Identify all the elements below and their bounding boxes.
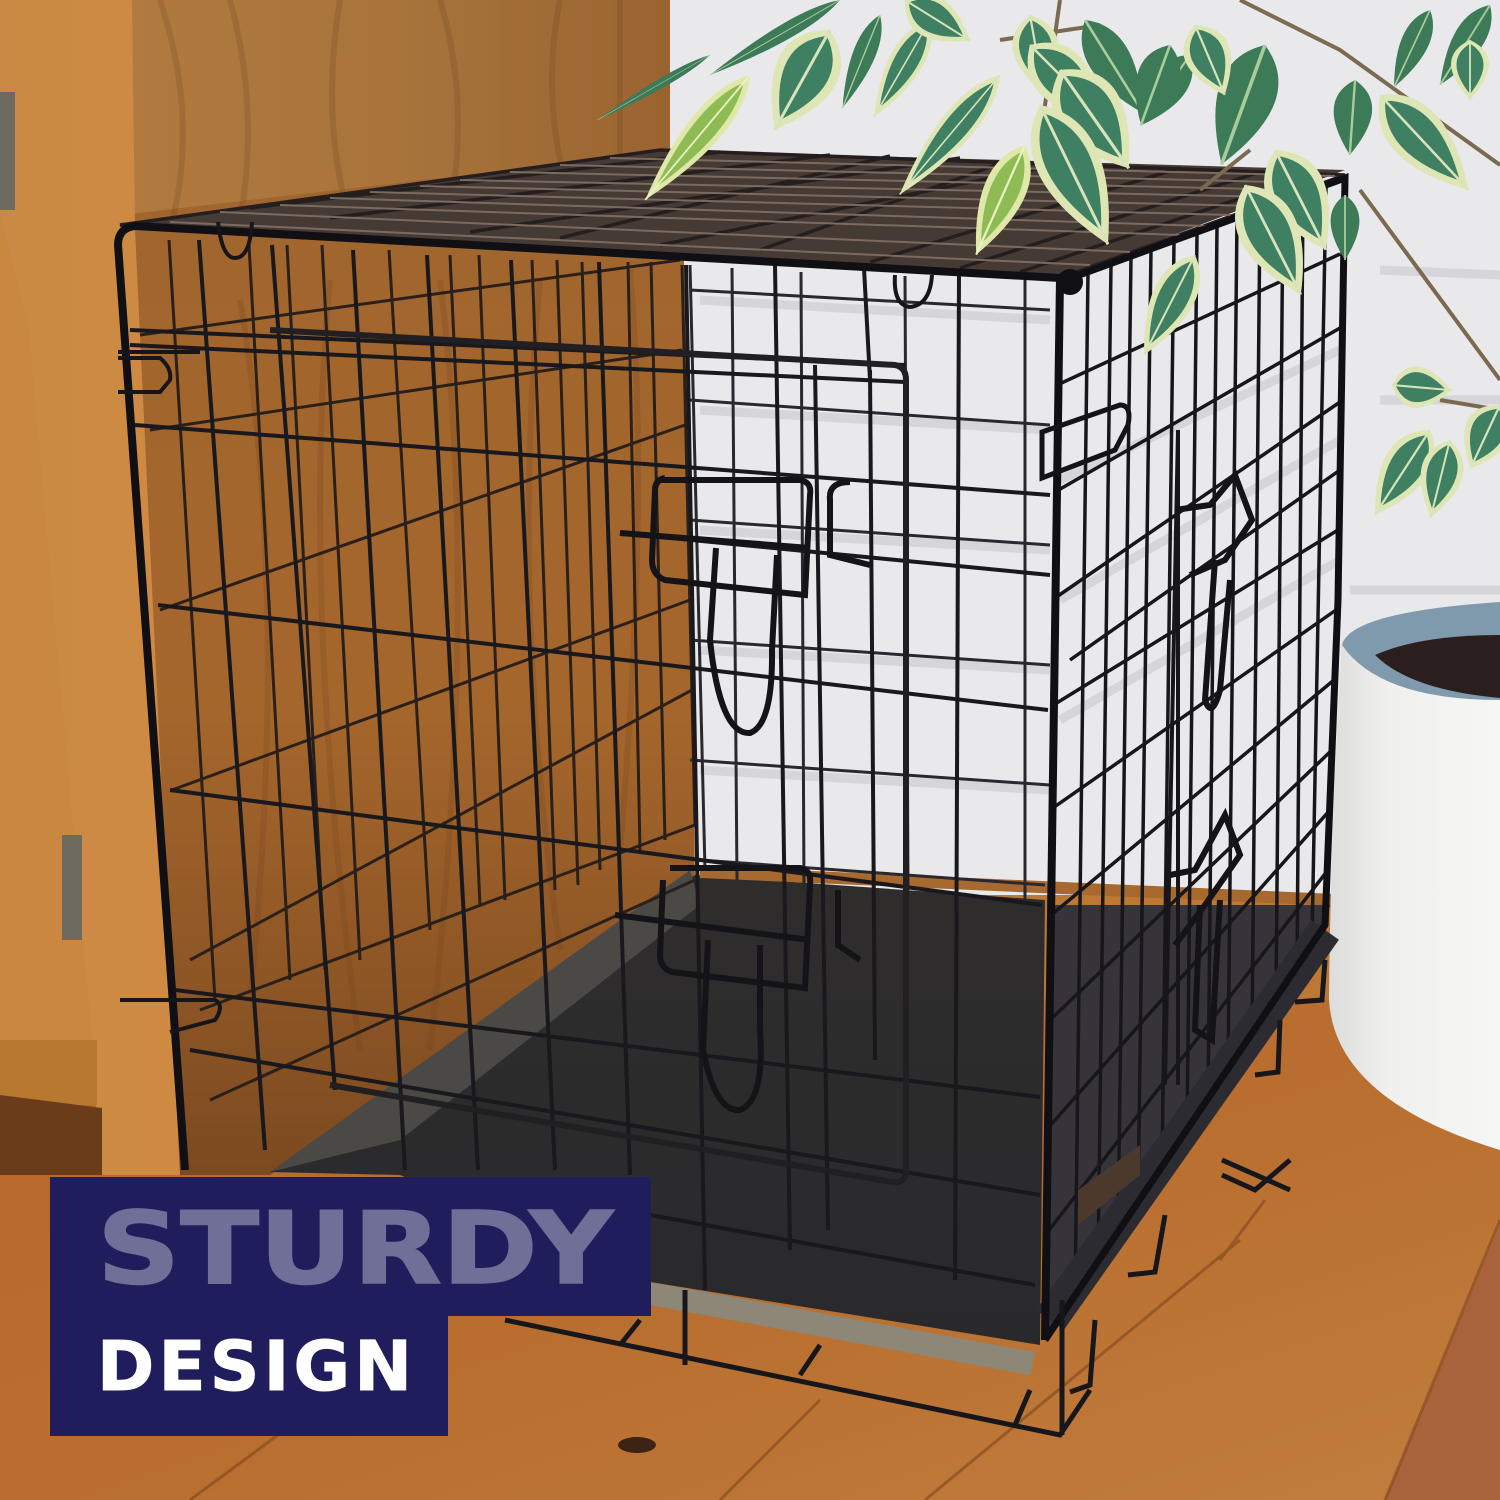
hinges [0,92,82,940]
area through right crate side [1045,905,1330,1340]
side handle clip [1042,405,1129,478]
floor far plank [1385,1225,1500,1500]
cabinet door rail [0,1040,97,1105]
crate: door frame [270,330,906,1182]
crate: top mesh [120,150,1345,278]
top hook [895,275,932,307]
plant pot [1329,602,1500,1150]
oak panel seen through crate [120,150,695,1175]
label background bottom [50,1316,448,1436]
plant stems [1000,0,1500,410]
label background top [50,1177,651,1316]
label: sturdy design [50,1177,651,1436]
lower door latch, front [615,868,860,1110]
shadow under cabinet [0,1095,102,1175]
background: white wall [660,0,1500,895]
crate: right side base band [1050,930,1325,1320]
heading: design: DESIGN [97,1327,412,1407]
crate: right side frame [1045,178,1345,1340]
pot soil [1375,635,1500,698]
tray front edge [650,1282,1035,1375]
cabinet door panel [0,215,92,1040]
tray rim left [270,870,700,1172]
plant leaves [595,0,1500,527]
oak cabinet side panel [120,0,670,240]
pot rim [1342,602,1500,700]
crate tray interior [270,875,1045,1345]
corner bracket [1057,269,1083,295]
crate tag [1078,1145,1140,1225]
wooden floor [0,1000,1500,1500]
floor knot [618,1437,656,1453]
wall shading [700,270,1500,790]
upper left hook [218,222,252,258]
crate: back wall wires [690,265,1050,900]
crate: right side wires [1046,187,1340,1300]
lower door latch, side [1170,815,1240,1040]
cabinet frame column [0,0,180,1175]
wooden ledge behind crate [700,872,1335,900]
crate: left wall wires [140,240,695,1100]
heading: sturdy: STURDY [97,1190,615,1307]
crate: front outer frame [118,226,1060,1340]
crate: front wires [130,240,1050,1290]
left clips [118,352,220,1032]
wood grain [160,0,638,1050]
upper door latch, side [1175,475,1252,708]
upper door latch, front [620,478,870,733]
floor planks [190,1200,1500,1500]
crate: base frame and feet [505,960,1325,1435]
